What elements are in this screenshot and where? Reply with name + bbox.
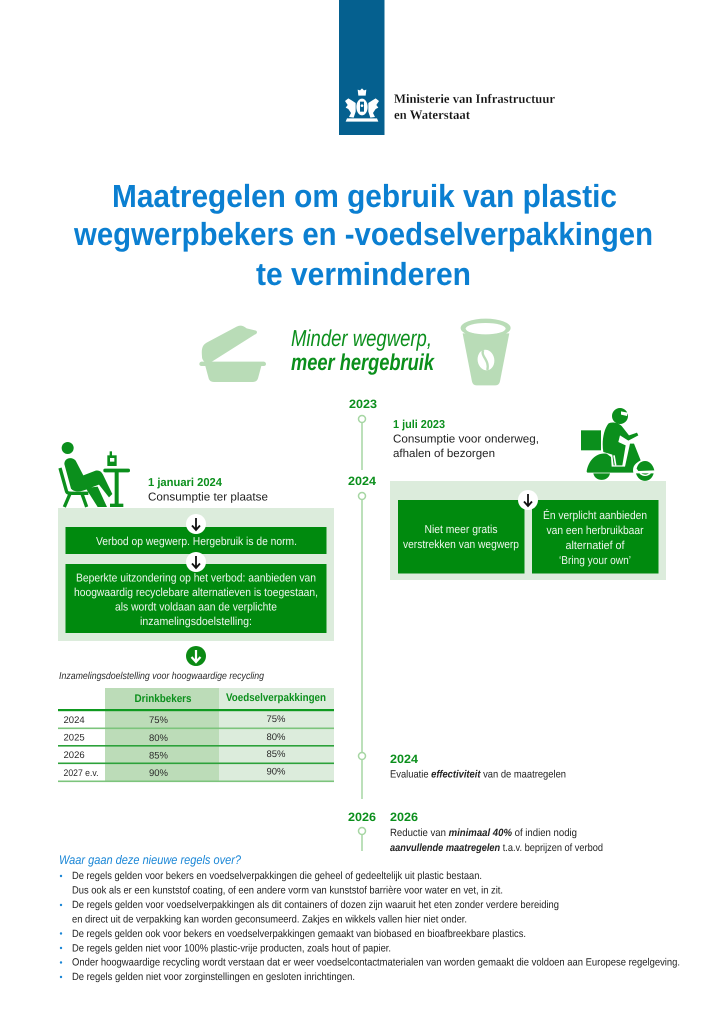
rule text: en direct uit de verpakking kan worden geconsumeerd. Zakjes en wikkels vallen hier niet onder. — [72, 914, 467, 926]
icon: person at table — [60, 442, 130, 507]
rule text: Dus ook als er een kunststof coating, of een andere vorm van kunststof barrière voor water en vet, in zit. — [72, 884, 503, 896]
timeline year labels: 2026 — [348, 810, 376, 824]
table voedselverpakkingen values: 85% — [266, 749, 286, 760]
table voedselverpakkingen values: 80% — [266, 732, 286, 743]
milestone: evaluatie 2024 — [390, 752, 566, 780]
box: niet meer gratis — [398, 500, 524, 574]
table drinkbekers values: 80% — [149, 733, 169, 744]
heading: 1 juli 2023: 1 juli 2023 — [393, 419, 445, 431]
table drinkbekers values: 85% — [149, 750, 169, 762]
milestone: evaluatie 2024: 2024 — [390, 752, 418, 766]
timeline — [348, 397, 377, 851]
milestone: reductie 2026 — [390, 810, 603, 854]
box: verbod: Verbod op wegwerp. Hergebruik is de norm. — [96, 536, 297, 548]
title: te verminderen — [256, 256, 471, 292]
timeline year labels: 2024 — [348, 474, 376, 488]
ministry name — [394, 91, 555, 122]
slogan: meer hergebruik — [291, 349, 435, 375]
arrow: down to table — [186, 646, 206, 666]
logo: ministry of infrastructure — [339, 0, 555, 135]
box: uitzondering — [66, 564, 326, 633]
box: uitzondering: als wordt voldaan aan de verplichte — [115, 602, 277, 614]
logo bar — [339, 0, 384, 135]
box: uitzondering: inzamelingsdoelstelling: — [140, 616, 252, 628]
icon: scooter delivery — [581, 408, 654, 481]
table years — [64, 715, 98, 779]
arrow: down 2 — [186, 552, 206, 572]
title — [73, 178, 653, 292]
list: rules — [60, 870, 680, 983]
rule text: De regels gelden voor voedselverpakkingen als dit containers of dozen zijn waaruit het eten zonder verdere bereiding — [72, 899, 559, 911]
table header — [134, 692, 326, 705]
milestone: evaluatie 2024: Evaluatie effectiviteit van de maatregelen — [390, 768, 566, 780]
icon: coat of arms — [345, 88, 379, 122]
arrow: down — [518, 490, 538, 510]
icon: coffee cup — [461, 319, 511, 385]
table voedselverpakkingen values — [266, 714, 286, 778]
box: uitzondering: hoogwaardig recyclebare alternatieven is toegestaan, — [74, 587, 318, 599]
arrow: down 1 — [186, 514, 206, 534]
heading: 1 juli 2023 — [393, 419, 539, 460]
heading: 1 januari 2024 — [148, 477, 268, 504]
heading: 1 januari 2024: 1 januari 2024 — [148, 477, 223, 489]
table voedselverpakkingen values: 75% — [266, 714, 286, 725]
table years: 2025 — [64, 732, 85, 744]
bullets — [60, 875, 62, 978]
milestone: reductie 2026: Reductie van minimaal 40% of indien nodig — [390, 827, 577, 839]
box: herbruikbaar alternatief: alternatief of — [566, 540, 625, 552]
timeline year labels: 2023 — [349, 397, 377, 411]
rule text: De regels gelden voor bekers en voedselverpakkingen die geheel of gedeeltelijk uit plastic bestaan. — [72, 870, 482, 882]
panel: voor onderweg — [390, 481, 666, 580]
table drinkbekers values: 90% — [149, 768, 169, 779]
table drinkbekers values: 75% — [149, 715, 169, 726]
table: inzamelingsdoelstelling — [58, 688, 334, 782]
rule text — [72, 870, 680, 983]
table drinkbekers values — [149, 715, 169, 779]
milestone: reductie 2026: aanvullende maatregelen t.a.v. beprijzen of verbod — [390, 842, 603, 854]
table voedselverpakkingen values: 90% — [266, 766, 286, 778]
timeline year labels — [348, 397, 377, 824]
box: herbruikbaar alternatief: Én verplicht aanbieden — [543, 509, 647, 522]
timeline line — [358, 416, 366, 851]
box: herbruikbaar alternatief — [532, 500, 658, 574]
rule text: De regels gelden niet voor 100% plastic-vrije producten, zoals hout of papier. — [72, 942, 391, 954]
slogan: Minder wegwerp, — [291, 325, 432, 351]
title: wegwerpbekers en -voedselverpakkingen — [73, 216, 653, 252]
milestone: reductie 2026: 2026 — [390, 810, 418, 824]
rule text: De regels gelden ook voor bekers en voedselverpakkingen gemaakt van biobased en bioafbreekbare plastics. — [72, 928, 526, 940]
table years: 2027 e.v. — [64, 768, 98, 779]
box: herbruikbaar alternatief: van een herbruikbaar — [546, 525, 644, 537]
icon: food container — [199, 326, 266, 382]
ministry name: Ministerie van Infrastructuur — [394, 91, 555, 106]
table years: 2024 — [64, 715, 85, 726]
box: herbruikbaar alternatief: ‘Bring your own’ — [559, 555, 631, 567]
heading: 1 juli 2023: afhalen of bezorgen — [393, 448, 495, 460]
ministry name: en Waterstaat — [394, 107, 471, 122]
rule text: De regels gelden niet voor zorginstellingen en gesloten inrichtingen. — [72, 971, 355, 983]
table caption: Inzamelingsdoelstelling voor hoogwaardige recycling — [59, 671, 264, 682]
panel: consumptie ter plaatse — [58, 508, 334, 641]
table years: 2026 — [64, 750, 85, 761]
heading: 1 juli 2023: Consumptie voor onderweg, — [393, 434, 539, 446]
box: verbod — [66, 527, 326, 554]
heading: waar gaan deze regels over: Waar gaan deze nieuwe regels over? — [59, 853, 241, 867]
box: uitzondering: Beperkte uitzondering op het verbod: aanbieden van — [76, 572, 316, 584]
slogan — [291, 325, 435, 375]
title: Maatregelen om gebruik van plastic — [112, 178, 617, 214]
table header: Voedselverpakkingen — [226, 692, 326, 704]
heading: 1 januari 2024: Consumptie ter plaatse — [148, 492, 268, 504]
box: niet meer gratis: verstrekken van wegwerp — [403, 539, 519, 551]
table header: Drinkbekers — [134, 693, 192, 705]
box: niet meer gratis: Niet meer gratis — [424, 524, 498, 536]
